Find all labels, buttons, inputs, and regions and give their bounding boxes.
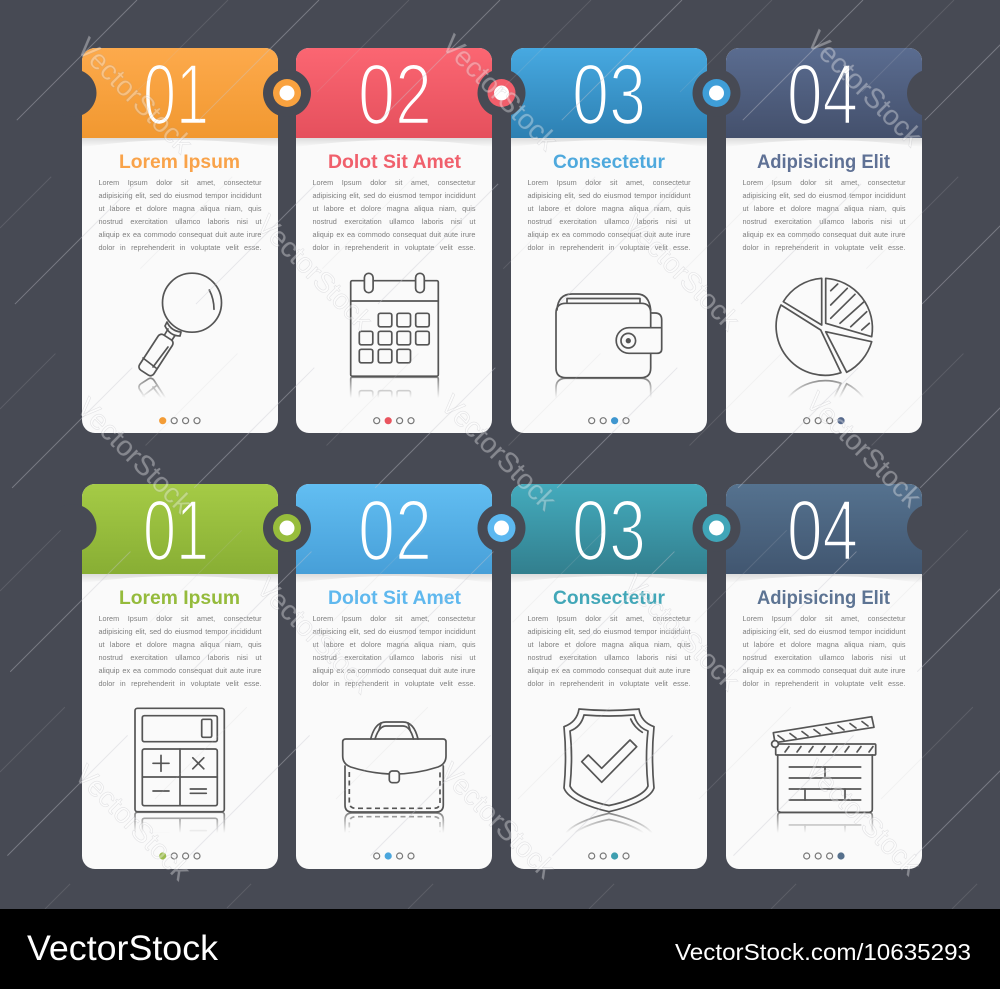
card 3 body text: adipisicing elit, sed do eiusmod tempor incididunt	[528, 191, 690, 200]
card 6 body text: adipisicing elit, sed do eiusmod tempor incididunt	[312, 627, 476, 636]
panel: card 2 red, calendar	[192, 47, 921, 862]
card 2 body text: ut labore et dolore magna aliqua niam, quis	[312, 204, 476, 213]
card 5 body text: nostrud exercitation ullamco laboris nisi ut	[98, 653, 262, 662]
card 1 body text: dolor in reprehenderit in voluptate velit esse.	[98, 243, 262, 252]
watermark overlay: VectorStock	[618, 569, 746, 697]
card 4 body text: Lorem Ipsum dolor sit amet, consectetur	[742, 178, 906, 186]
watermark overlay: VectorStock	[801, 25, 929, 153]
card 8 body text	[742, 614, 906, 688]
card 4 graphics	[726, 47, 922, 433]
card 3 body text	[528, 178, 690, 252]
card 2 body text: adipisicing elit, sed do eiusmod tempor incididunt	[312, 191, 476, 200]
panel: card 5 green, calculator	[82, 483, 921, 869]
card 3 graphics: Consectetur	[553, 152, 666, 173]
card 2 graphics	[192, 47, 921, 862]
card 2 body text: dolor in reprehenderit in voluptate velit esse.	[312, 243, 476, 252]
watermark overlay: VectorStock	[69, 759, 197, 887]
card 6 graphics: 02	[358, 483, 432, 579]
card 6 body text: nostrud exercitation ullamco laboris nisi ut	[312, 653, 476, 662]
panel: card 6 light blue, briefcase	[296, 483, 921, 869]
card 5 graphics	[82, 483, 921, 869]
card 8 body text: Lorem Ipsum dolor sit amet, consectetur	[742, 614, 906, 622]
card 4 body text: aliquip ex ea commodo consequat duit aute irure	[742, 230, 906, 239]
watermark overlay: VectorStock	[251, 572, 379, 700]
watermark overlay: VectorStock	[618, 209, 746, 337]
watermark overlay: VectorStock	[434, 757, 562, 885]
card 7 body text: nostrud exercitation ullamco laboris nisi ut	[528, 653, 690, 662]
card 6 body text: Lorem Ipsum dolor sit amet, consectetur	[312, 614, 476, 622]
card 4 graphics: 04	[787, 47, 858, 143]
card 1 graphics	[82, 47, 921, 862]
card 4 body text	[742, 178, 906, 252]
card 2 body text: nostrud exercitation ullamco laboris nisi ut	[312, 217, 476, 226]
card 7 graphics	[511, 483, 921, 869]
card 1 body text: aliquip ex ea commodo consequat duit aute irure	[98, 230, 262, 239]
card 5 body text: Lorem Ipsum dolor sit amet, consectetur	[98, 614, 262, 622]
footer logo: VectorStock	[27, 929, 219, 968]
card 3 graphics: 03	[572, 47, 646, 143]
card 2 body text: Lorem Ipsum dolor sit amet, consectetur	[312, 178, 476, 186]
card 6 body text: dolor in reprehenderit in voluptate velit esse.	[312, 679, 476, 688]
card 4 body text: dolor in reprehenderit in voluptate velit esse.	[742, 243, 906, 252]
panel: card 8 slate, clapperboard	[726, 483, 922, 869]
card 3 body text: aliquip ex ea commodo consequat duit aute irure	[528, 230, 690, 239]
panel: card 1 orange, magnifier	[82, 47, 921, 862]
card 5 body text: aliquip ex ea commodo consequat duit aute irure	[98, 666, 262, 675]
card 7 body text	[528, 614, 690, 688]
card 2 body text: aliquip ex ea commodo consequat duit aute irure	[312, 230, 476, 239]
card 7 body text: adipisicing elit, sed do eiusmod tempor incididunt	[528, 627, 690, 636]
card 2 body text	[312, 178, 476, 252]
watermark overlay: VectorStock	[436, 29, 564, 157]
card 8 body text: adipisicing elit, sed do eiusmod tempor incididunt	[742, 627, 906, 636]
card 3 body text: nostrud exercitation ullamco laboris nisi ut	[528, 217, 690, 226]
card 1 graphics: 01	[143, 47, 209, 143]
card 7 graphics: Consectetur	[553, 588, 666, 609]
card 8 body text: ut labore et dolore magna aliqua niam, quis	[742, 640, 906, 649]
card 6 body text	[312, 614, 476, 688]
card 8 body text: dolor in reprehenderit in voluptate velit esse.	[742, 679, 906, 688]
panel: card 3 blue, wallet	[511, 47, 921, 752]
card 5 body text: ut labore et dolore magna aliqua niam, quis	[98, 640, 262, 649]
card 1 body text: ut labore et dolore magna aliqua niam, quis	[98, 204, 262, 213]
watermark overlay: VectorStock	[71, 32, 199, 160]
card 3 body text: ut labore et dolore magna aliqua niam, quis	[528, 204, 690, 213]
card 7 body text: dolor in reprehenderit in voluptate velit esse.	[528, 679, 690, 688]
watermark overlay: VectorStock	[71, 392, 199, 520]
card 7 body text: aliquip ex ea commodo consequat duit aute irure	[528, 666, 690, 675]
card 3 body text: dolor in reprehenderit in voluptate velit esse.	[528, 243, 690, 252]
card 5 body text	[98, 614, 262, 688]
card 2 graphics: Dolot Sit Amet	[328, 152, 462, 173]
card 5 graphics: Lorem Ipsum	[119, 588, 240, 609]
card 8 graphics: 04	[787, 483, 858, 579]
card 5 body text: adipisicing elit, sed do eiusmod tempor incididunt	[98, 627, 262, 636]
card 5 graphics: 01	[143, 483, 209, 579]
card 1 body text	[98, 178, 262, 252]
card 5 body text: dolor in reprehenderit in voluptate velit esse.	[98, 679, 262, 688]
footer bar	[0, 909, 1000, 989]
card 8 graphics	[726, 483, 922, 869]
card 4 graphics: Adipisicing Elit	[757, 152, 891, 173]
footer url: VectorStock.com/10635293	[675, 939, 971, 965]
panel: card 7 teal, shield	[511, 483, 921, 869]
watermark overlay: VectorStock	[435, 389, 563, 517]
card 2 graphics: 02	[358, 47, 432, 143]
top row connectors	[48, 69, 955, 117]
panel: card 4 navy, pie chart	[726, 47, 922, 433]
card 1 graphics: Lorem Ipsum	[119, 152, 240, 173]
card 8 graphics: Adipisicing Elit	[757, 588, 891, 609]
card 6 body text: ut labore et dolore magna aliqua niam, quis	[312, 640, 476, 649]
card 6 graphics: Dolot Sit Amet	[328, 588, 462, 609]
bottom row connectors	[48, 504, 955, 552]
card 4 body text: ut labore et dolore magna aliqua niam, quis	[742, 204, 906, 213]
watermark overlay: VectorStock	[251, 209, 379, 337]
card 3 body text: Lorem Ipsum dolor sit amet, consectetur	[528, 178, 690, 186]
watermark overlay: VectorStock	[800, 386, 928, 514]
card 4 body text: adipisicing elit, sed do eiusmod tempor incididunt	[742, 191, 906, 200]
card 8 body text: aliquip ex ea commodo consequat duit aute irure	[742, 666, 906, 675]
card 1 body text: Lorem Ipsum dolor sit amet, consectetur	[98, 178, 262, 186]
card 7 body text: Lorem Ipsum dolor sit amet, consectetur	[528, 614, 690, 622]
card 3 graphics	[511, 47, 921, 752]
card 6 body text: aliquip ex ea commodo consequat duit aute irure	[312, 666, 476, 675]
card 7 graphics: 03	[572, 483, 646, 579]
card 4 body text: nostrud exercitation ullamco laboris nisi ut	[742, 217, 906, 226]
card 7 body text: ut labore et dolore magna aliqua niam, quis	[528, 640, 690, 649]
watermark overlay: VectorStock	[799, 754, 927, 882]
card 1 body text: adipisicing elit, sed do eiusmod tempor incididunt	[98, 191, 262, 200]
card 6 graphics	[296, 483, 921, 869]
card 8 body text: nostrud exercitation ullamco laboris nisi ut	[742, 653, 906, 662]
card 1 body text: nostrud exercitation ullamco laboris nisi ut	[98, 217, 262, 226]
